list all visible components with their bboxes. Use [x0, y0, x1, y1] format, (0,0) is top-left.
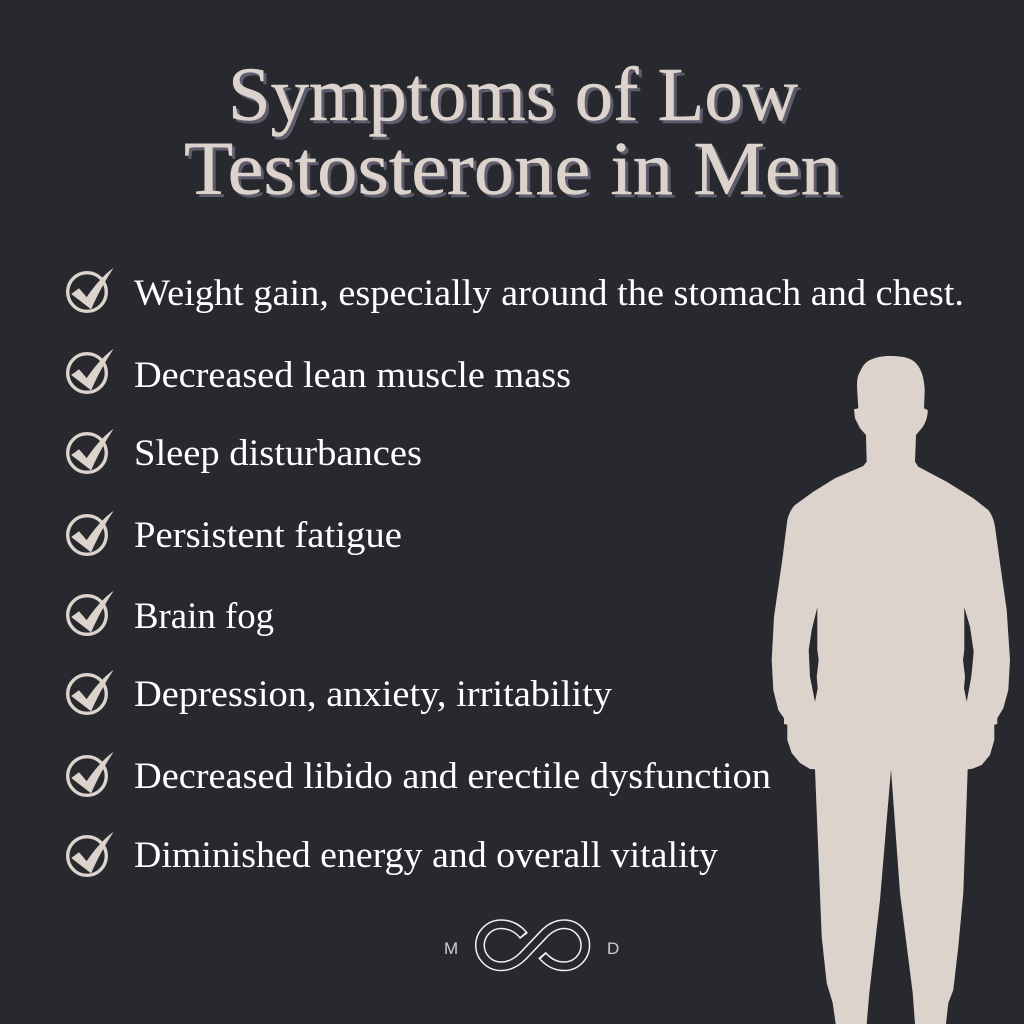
item: weight gain: Weight gain, especially around the stomach and chest. — [134, 273, 964, 314]
item: sleep disturbances: Sleep disturbances — [134, 433, 422, 474]
title — [184, 53, 841, 211]
item: lean muscle mass: Decreased lean muscle mass — [134, 355, 571, 396]
icon: male silhouette — [772, 356, 1010, 1024]
logo: MD infinity: D — [607, 939, 619, 958]
logo: MD infinity — [444, 924, 619, 966]
item: persistent fatigue: Persistent fatigue — [134, 515, 402, 556]
title: Testosterone in Men — [184, 127, 841, 211]
logo: MD infinity: M — [444, 939, 458, 958]
item: brain fog: Brain fog — [134, 596, 274, 637]
item: energy: Diminished energy and overall vitality — [134, 835, 718, 876]
item: depression: Depression, anxiety, irritability — [134, 674, 613, 715]
symptom list — [68, 268, 964, 876]
item: libido: Decreased libido and erectile dysfunction — [134, 756, 771, 797]
item: brain fog — [68, 592, 274, 637]
title: Symptoms of Low — [228, 53, 798, 137]
